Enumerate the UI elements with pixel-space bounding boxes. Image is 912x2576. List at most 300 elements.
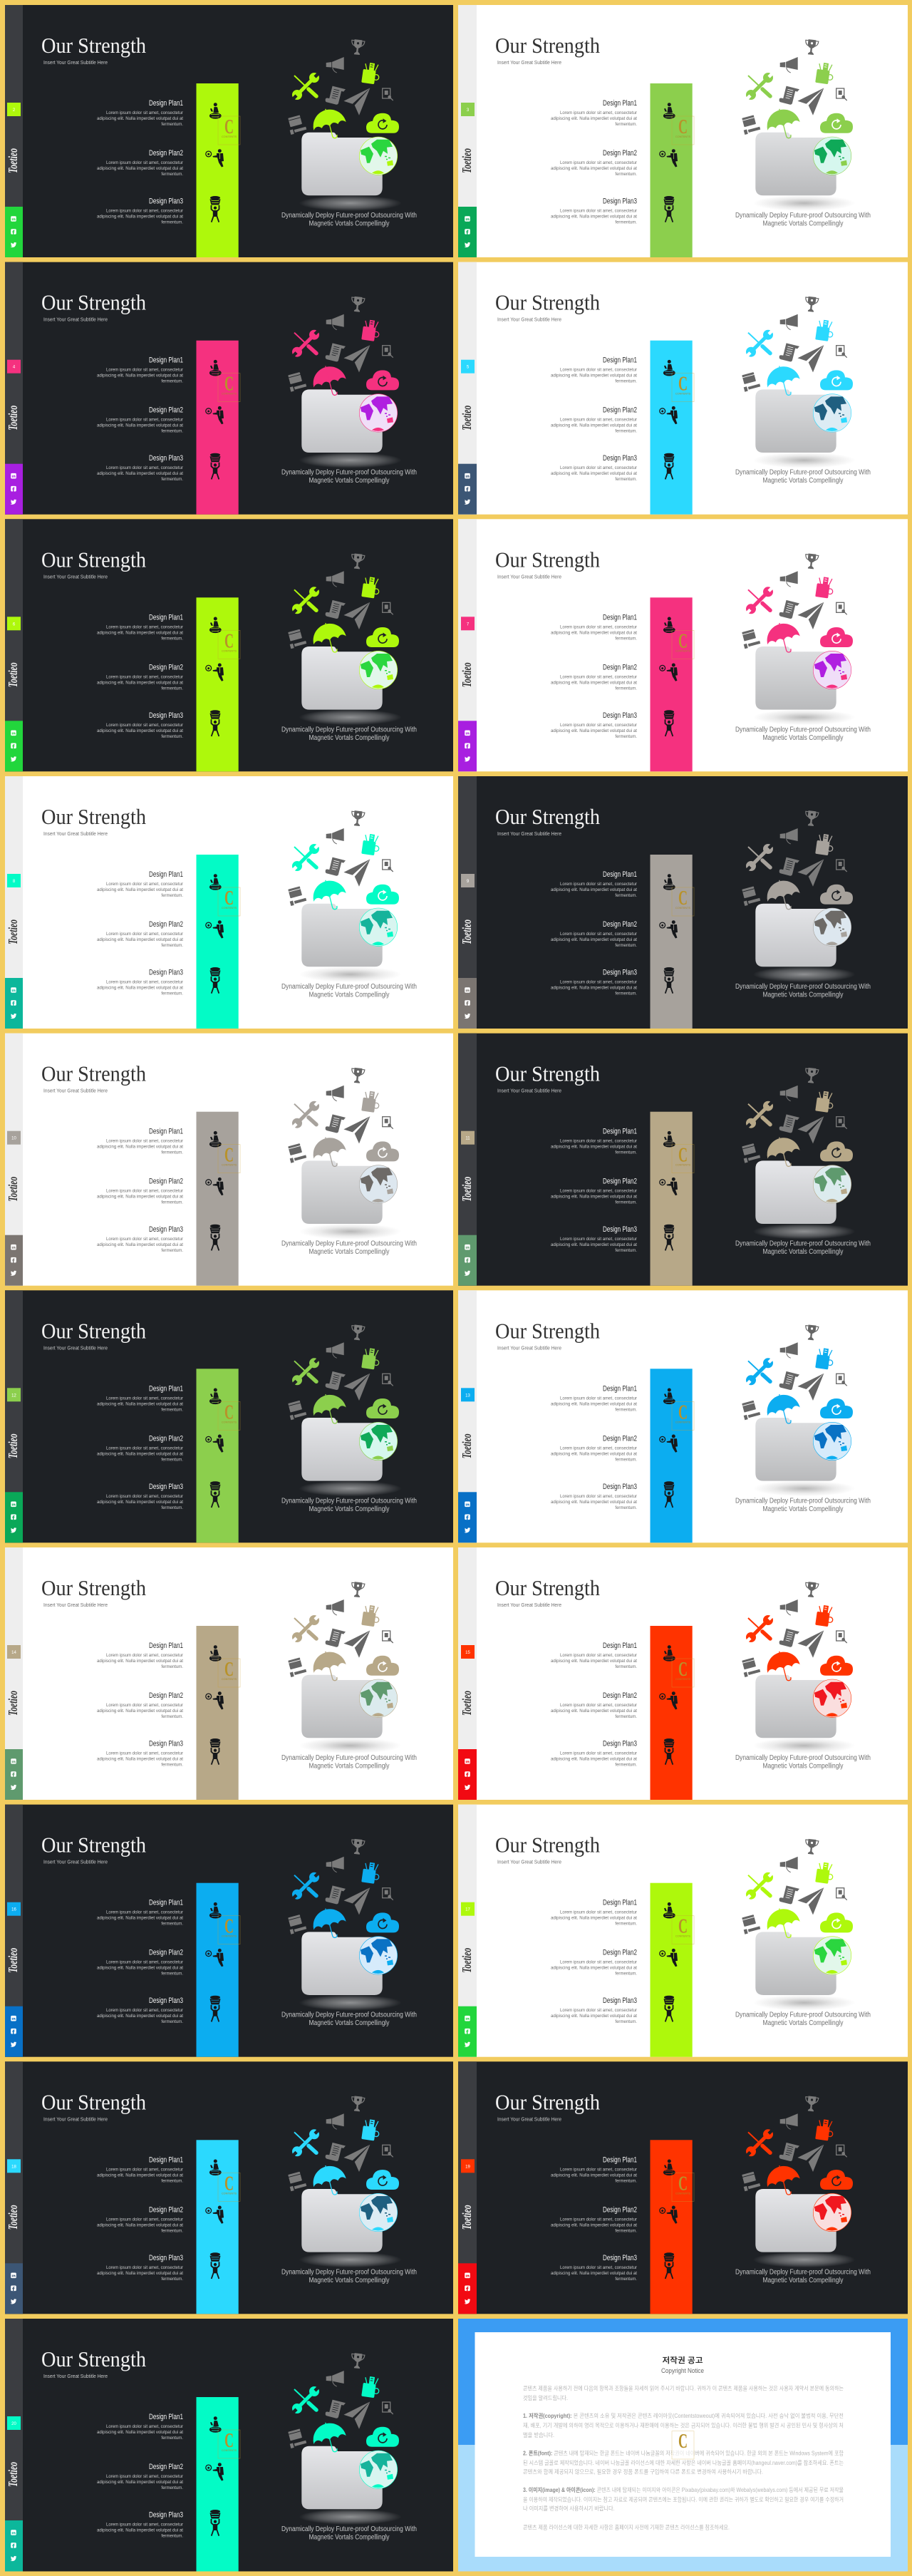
text block: Design Plan3	[97, 1483, 184, 1510]
text block: Design Plan2: adipiscing elit. Nulla imperdiet volutpat dui at	[551, 423, 637, 428]
watermark	[672, 1916, 694, 1944]
watermark: C	[224, 630, 234, 652]
icon: paper plane	[343, 345, 370, 372]
text block: Design Plan1	[97, 1642, 184, 1669]
text block: Design Plan2: Design Plan2	[149, 406, 183, 415]
icon: man with magnifier	[206, 1949, 224, 1967]
text block: Design Plan3: Lorem ipsum dolor sit amet, consectetur	[560, 1494, 638, 1499]
slide number	[7, 1645, 21, 1659]
icon: scroll	[779, 856, 799, 877]
icon: paper plane	[343, 1116, 370, 1143]
icon: trophy	[804, 1324, 819, 1341]
title: Our Strength	[41, 1833, 146, 1858]
text block: Design Plan1: Design Plan1	[149, 99, 183, 108]
text block: Design Plan3	[551, 1997, 638, 2024]
social block	[5, 721, 23, 771]
folder card	[301, 2446, 383, 2509]
text block: Design Plan1: adipiscing elit. Nulla imperdiet volutpat dui at	[551, 1916, 637, 1921]
text block: Design Plan2	[551, 1691, 638, 1719]
panel: slide 13 light blue	[458, 1290, 908, 1542]
text block: Design Plan1: Design Plan1	[603, 870, 637, 879]
text block: Design Plan3: fermentum.	[615, 2277, 637, 2282]
icon: mug of pens	[815, 1347, 834, 1370]
text block: Design Plan3: adipiscing elit. Nulla imperdiet volutpat dui at	[97, 1242, 183, 1247]
icon: tablet search	[836, 1117, 847, 1129]
icon: tools	[291, 2128, 321, 2158]
sidebar	[458, 1290, 477, 1542]
text block: Design Plan2: Design Plan2	[149, 1949, 183, 1957]
brand script: Toetieo	[460, 148, 474, 173]
slide number: 2	[13, 108, 16, 113]
text block: Design Plan1: Design Plan1	[603, 356, 637, 365]
icon: cloud refresh	[366, 370, 399, 390]
text block: Design Plan2: fermentum.	[161, 429, 183, 434]
folder shadow	[299, 967, 402, 982]
text block: Design Plan1: adipiscing elit. Nulla imperdiet volutpat dui at	[97, 887, 183, 892]
icon: man with magnifier	[206, 1691, 224, 1709]
text block: Design Plan1: adipiscing elit. Nulla imperdiet volutpat dui at	[551, 1659, 637, 1664]
watermark: C	[678, 630, 688, 652]
text block: Design Plan2: Lorem ipsum dolor sit amet, consectetur	[560, 1960, 638, 1965]
folder shadow	[753, 1480, 856, 1496]
icon: tools	[745, 329, 774, 359]
icon: cloud refresh	[820, 1656, 853, 1676]
sidebar	[458, 1547, 477, 1800]
panel: slide 15 light red	[458, 1547, 908, 1800]
text block: Design Plan3: adipiscing elit. Nulla imperdiet volutpat dui at	[97, 985, 183, 991]
caption	[735, 2268, 871, 2284]
icon: man lifting basket	[664, 1225, 674, 1250]
icon: man with magnifier	[660, 406, 678, 424]
text block: Design Plan2: adipiscing elit. Nulla imperdiet volutpat dui at	[551, 1451, 637, 1456]
slide background	[458, 2061, 908, 2314]
social block	[5, 207, 23, 257]
watermark: CONTENTS	[222, 392, 237, 396]
text block: Design Plan1: fermentum.	[615, 379, 637, 384]
icon: man with magnifier	[660, 149, 678, 167]
text block: Design Plan3	[551, 1483, 638, 1510]
text block: Design Plan2: Design Plan2	[149, 149, 183, 158]
icon: paper plane	[343, 1887, 370, 1915]
watermark	[218, 2173, 240, 2201]
caption: Magnetic Vortals Compellingly	[762, 220, 844, 228]
brand script: Toetieo	[460, 406, 474, 431]
title: Our Strength	[41, 2089, 146, 2114]
slide number: 9	[467, 880, 470, 884]
watermark	[672, 2173, 694, 2201]
social block	[458, 721, 477, 771]
caption	[281, 1497, 417, 1513]
caption: Magnetic Vortals Compellingly	[309, 1505, 390, 1513]
slide number: 15	[465, 1651, 470, 1655]
text block: Design Plan1: Design Plan1	[149, 2413, 183, 2421]
text block: Design Plan3: adipiscing elit. Nulla imperdiet volutpat dui at	[97, 1756, 183, 1762]
watermark	[218, 373, 240, 402]
blue background top	[458, 2319, 908, 2445]
icon: mug of pens	[361, 1347, 380, 1370]
text block: Design Plan3: Design Plan3	[603, 1997, 637, 2005]
icon: tools	[291, 843, 321, 872]
icon: umbrella	[763, 2161, 803, 2200]
watermark: C	[678, 116, 688, 138]
icon: tablet search	[836, 1631, 847, 1643]
slide background	[458, 1547, 908, 1800]
icon: man with magnifier	[660, 1691, 678, 1709]
slide number	[461, 1131, 475, 1145]
sidebar	[5, 1547, 23, 1800]
icon: tablet search	[383, 1631, 393, 1643]
icon: umbrella	[763, 1133, 803, 1171]
text block: Design Plan3	[551, 1739, 638, 1768]
text block: Design Plan3: adipiscing elit. Nulla imperdiet volutpat dui at	[551, 1756, 637, 1762]
text block: Design Plan3: fermentum.	[615, 2019, 637, 2024]
accent bar	[197, 1883, 239, 2057]
slide number	[7, 1388, 21, 1401]
icon: megaphone	[780, 314, 798, 330]
watermark: CONTENTS	[222, 649, 237, 652]
text block: Design Plan1: Lorem ipsum dolor sit amet, consectetur	[106, 1910, 184, 1915]
watermark: C	[678, 1916, 688, 1938]
icon: person with laptop	[209, 1389, 222, 1404]
section 1 copyright: 재, 배포, 기기 개발에 의하여 영리 목적으로 이용하거나 재판매에 이용하는 것은 금지되어 있습니다. 이러한 불법 행위 발견 시 공인된 민사 및 형사상의 처	[523, 2422, 844, 2429]
social block	[5, 2006, 23, 2057]
icon: man with magnifier	[660, 1949, 678, 1967]
slide background	[458, 1034, 908, 1286]
icon: man with magnifier	[206, 2205, 224, 2224]
icon: trophy	[351, 1324, 365, 1341]
social block	[458, 1235, 477, 1286]
text block: Design Plan3: adipiscing elit. Nulla imperdiet volutpat dui at	[551, 214, 637, 220]
text block: Design Plan1	[97, 613, 184, 641]
text block: Design Plan1: Lorem ipsum dolor sit amet, consectetur	[560, 110, 638, 115]
text block: Design Plan1	[97, 99, 184, 127]
icon: mug of pens	[815, 319, 834, 342]
icon: umbrella	[309, 2161, 349, 2200]
caption: Magnetic Vortals Compellingly	[762, 477, 844, 485]
text block: Design Plan1: Lorem ipsum dolor sit amet, consectetur	[560, 1910, 638, 1915]
icon: umbrella	[763, 1905, 803, 1942]
text block: Design Plan1: adipiscing elit. Nulla imperdiet volutpat dui at	[97, 1659, 183, 1664]
icon: megaphone	[780, 1599, 798, 1615]
icon: trophy	[351, 297, 365, 312]
icon: trophy	[351, 39, 365, 56]
text block: Design Plan3: Design Plan3	[603, 197, 637, 205]
text block: Design Plan1: adipiscing elit. Nulla imperdiet volutpat dui at	[97, 1916, 183, 1921]
text block: Design Plan2	[551, 663, 638, 691]
caption	[735, 2011, 871, 2027]
text block: Design Plan1: Lorem ipsum dolor sit amet, consectetur	[106, 368, 184, 373]
icon: man lifting basket	[209, 710, 221, 736]
accent bar	[197, 83, 239, 257]
text block: Design Plan1	[97, 1899, 184, 1927]
text block: Design Plan1	[551, 1128, 638, 1155]
caption	[735, 212, 871, 228]
text block: Design Plan3: Lorem ipsum dolor sit amet, consectetur	[560, 465, 638, 470]
icon: umbrella	[763, 876, 803, 914]
text block: Design Plan3	[97, 2510, 184, 2539]
sidebar	[5, 1290, 23, 1542]
brand script: Toetieo	[460, 919, 474, 944]
title: Our Strength	[495, 290, 600, 315]
social block	[5, 1749, 23, 1800]
text block: Design Plan2: fermentum.	[615, 1972, 637, 1977]
slide number: 17	[465, 1908, 470, 1912]
slide background	[458, 5, 908, 257]
text block: Design Plan2: Design Plan2	[149, 663, 183, 671]
text block: Design Plan2: Lorem ipsum dolor sit amet, consectetur	[106, 1960, 184, 1965]
intro text: 콘텐츠 제품을 사용하기 전에 다음의 항목과 조항들을 자세히 읽어 주시기 바랍니다. 귀하가 이 콘텐츠 제품을 사용하는 것은 사용자 계약서 본문에 동의하는	[523, 2385, 844, 2392]
watermark: C	[678, 1401, 688, 1423]
icon: cloud refresh	[366, 2427, 399, 2447]
icon: paper plane	[797, 345, 824, 372]
icon: mug of pens	[815, 2118, 834, 2141]
text block: Design Plan3: fermentum.	[615, 734, 637, 739]
text block: Design Plan3: adipiscing elit. Nulla imperdiet volutpat dui at	[551, 1242, 637, 1247]
text block: Design Plan2: Lorem ipsum dolor sit amet, consectetur	[560, 1703, 638, 1708]
text block: Design Plan2	[97, 2205, 184, 2233]
section 3 image and icon: 나 이미지를 변경하여 사용하시기 바랍니다.	[523, 2505, 615, 2512]
text block: Design Plan2: Design Plan2	[603, 1691, 637, 1700]
slide number: 18	[11, 2165, 16, 2169]
panel: slide 3 light green	[458, 5, 908, 257]
sidebar	[5, 2061, 23, 2314]
watermark: C	[224, 887, 234, 910]
icon: trophy	[804, 553, 819, 570]
icon: scroll	[325, 1627, 346, 1649]
slide number: 20	[11, 2422, 16, 2426]
accent bar	[197, 597, 239, 771]
panel: slide 4 dark pink	[5, 262, 453, 515]
text block: Design Plan1	[551, 613, 638, 641]
icon: man with magnifier	[206, 663, 224, 681]
social block	[458, 1749, 477, 1800]
caption	[735, 469, 871, 485]
text block: Design Plan1: Lorem ipsum dolor sit amet, consectetur	[560, 1139, 638, 1144]
slide number	[7, 103, 21, 116]
accent bar	[650, 855, 693, 1029]
icon: cloud refresh	[820, 113, 853, 133]
caption: Magnetic Vortals Compellingly	[309, 220, 390, 228]
icon: scroll	[325, 1113, 346, 1134]
icon: globe	[359, 651, 398, 689]
icon: laptops	[286, 114, 307, 135]
brand script: Toetieo	[460, 2205, 474, 2230]
notice heading: 저작권 공고	[663, 2355, 703, 2365]
text block: Design Plan2: fermentum.	[161, 1200, 183, 1205]
slide number: 3	[467, 108, 470, 113]
text block: Design Plan2: Design Plan2	[603, 663, 637, 671]
sidebar	[458, 1805, 477, 2057]
icon: man with magnifier	[206, 149, 224, 167]
subtitle: Insert Your Great Subtitle Here	[497, 318, 561, 323]
caption	[281, 2525, 417, 2542]
icon: trophy	[804, 1839, 819, 1855]
text block: Design Plan2: Lorem ipsum dolor sit amet, consectetur	[560, 418, 638, 423]
icon: tools	[291, 1871, 321, 1901]
caption: Dynamically Deploy Future-proof Outsourcing With	[735, 2011, 871, 2019]
text block: Design Plan2: adipiscing elit. Nulla imperdiet volutpat dui at	[551, 2222, 637, 2227]
icon: paper plane	[797, 2145, 824, 2172]
text block: Design Plan2: Design Plan2	[603, 920, 637, 929]
text block: Design Plan3: Lorem ipsum dolor sit amet, consectetur	[106, 208, 184, 214]
icon: man with magnifier	[660, 1434, 678, 1453]
caption	[281, 469, 417, 485]
text block: Design Plan3	[551, 968, 638, 996]
panel: slide 9 dark gray	[458, 776, 908, 1029]
icon: trophy	[351, 1839, 365, 1855]
icon: cloud refresh	[820, 1141, 853, 1161]
text block: Design Plan2: adipiscing elit. Nulla imperdiet volutpat dui at	[97, 423, 183, 428]
icon: man lifting basket	[209, 967, 221, 994]
caption	[735, 1240, 871, 1256]
text block: Design Plan3: Lorem ipsum dolor sit amet, consectetur	[560, 1237, 638, 1242]
icon: man lifting basket	[664, 710, 674, 736]
text block: Design Plan2	[97, 1691, 184, 1719]
text block: Design Plan2: adipiscing elit. Nulla imperdiet volutpat dui at	[97, 2222, 183, 2227]
text block: Design Plan2: Lorem ipsum dolor sit amet, consectetur	[560, 160, 638, 165]
icon: person with laptop	[209, 360, 222, 376]
icon: trophy	[804, 297, 819, 312]
icon: umbrella	[309, 105, 349, 143]
icon: cloud refresh	[820, 885, 853, 905]
watermark	[218, 2430, 240, 2458]
slide background	[458, 1805, 908, 2057]
folder shadow	[299, 1480, 402, 1496]
icon: laptops	[286, 2428, 307, 2448]
icon: mug of pens	[361, 1862, 380, 1885]
title: Our Strength	[41, 1318, 146, 1343]
text block: Design Plan1: adipiscing elit. Nulla imperdiet volutpat dui at	[97, 373, 183, 378]
text block: Design Plan3: Design Plan3	[603, 711, 637, 720]
subtitle: Insert Your Great Subtitle Here	[43, 61, 108, 66]
text block: Design Plan1: Design Plan1	[603, 1899, 637, 1907]
text block: Design Plan1: Lorem ipsum dolor sit amet, consectetur	[106, 624, 184, 629]
watermark	[672, 2431, 694, 2459]
slide number	[461, 2159, 475, 2173]
icon: laptops	[286, 1914, 307, 1934]
text block: Design Plan2: Design Plan2	[603, 1178, 637, 1186]
title: Our Strength	[41, 2346, 146, 2371]
text block: Design Plan2: fermentum.	[161, 686, 183, 691]
icon: trophy	[351, 1582, 365, 1598]
icon: tablet search	[383, 2402, 393, 2414]
icon: laptops	[286, 1657, 307, 1677]
subtitle: Insert Your Great Subtitle Here	[497, 832, 561, 837]
icon: umbrella	[763, 1390, 803, 1428]
icon: megaphone	[326, 1342, 344, 1358]
icon: globe	[359, 1165, 398, 1203]
sidebar	[5, 5, 23, 257]
caption	[281, 1754, 417, 1771]
text block: Design Plan1: Design Plan1	[603, 99, 637, 108]
icon: scroll	[779, 1113, 799, 1134]
section 2 font	[523, 2449, 844, 2475]
slide background	[5, 1805, 453, 2057]
icon: megaphone	[326, 2371, 344, 2386]
icon: umbrella	[309, 1390, 349, 1428]
caption: Magnetic Vortals Compellingly	[309, 1248, 390, 1256]
icon: man lifting basket	[209, 1738, 221, 1765]
slide number	[7, 2416, 21, 2430]
icon: laptops	[740, 1914, 761, 1934]
sidebar	[458, 776, 477, 1029]
text block: Design Plan2: adipiscing elit. Nulla imperdiet volutpat dui at	[97, 1195, 183, 1200]
icon: man lifting basket	[664, 453, 674, 479]
caption: Dynamically Deploy Future-proof Outsourcing With	[281, 2525, 417, 2533]
icon: man with magnifier	[660, 663, 678, 681]
icon: umbrella	[309, 1647, 349, 1685]
icon: paper plane	[343, 2145, 370, 2172]
caption: Dynamically Deploy Future-proof Outsourcing With	[735, 726, 871, 733]
text block: Design Plan3: fermentum.	[615, 1248, 637, 1253]
caption	[735, 726, 871, 742]
watermark: CONTENTS	[675, 135, 690, 138]
slide number	[461, 617, 475, 630]
watermark: CONTENTS	[675, 392, 690, 396]
accent bar	[650, 341, 693, 515]
icon: mug of pens	[361, 319, 380, 342]
slide number: 13	[465, 1393, 470, 1398]
title: Our Strength	[495, 1061, 600, 1086]
accent bar	[197, 2140, 239, 2314]
text block: Design Plan2	[97, 1949, 184, 1977]
text block: Design Plan2: Design Plan2	[603, 1949, 637, 1957]
icon: mug of pens	[815, 833, 834, 856]
text block: Design Plan3	[97, 1997, 184, 2024]
icon: tablet search	[836, 1374, 847, 1386]
watermark	[218, 1916, 240, 1944]
icon: paper plane	[797, 88, 824, 115]
caption: Dynamically Deploy Future-proof Outsourcing With	[735, 1240, 871, 1248]
text block: Design Plan3: Design Plan3	[603, 454, 637, 463]
slide number: 10	[11, 1137, 16, 1141]
section 1 copyright	[523, 2412, 844, 2438]
section 2 font: 2. 폰트(font): 콘텐츠 내에 탑재되는 한글 폰트는 네이버 나눔글꼴의 저작권이 네이버에 귀속되어 있습니다. 한글 외의 본 폰트는 Windows System에 포함	[523, 2449, 844, 2456]
caption: Dynamically Deploy Future-proof Outsourcing With	[735, 469, 871, 477]
icon: tools	[291, 71, 321, 101]
caption	[735, 1754, 871, 1771]
accent bar	[197, 1369, 239, 1542]
text block: Design Plan3	[551, 711, 638, 739]
slide number: 8	[13, 880, 16, 884]
icon: umbrella	[763, 362, 803, 400]
icon: person with laptop	[663, 1131, 675, 1148]
text block: Design Plan3: fermentum.	[615, 220, 637, 225]
text block: Design Plan2: adipiscing elit. Nulla imperdiet volutpat dui at	[551, 1966, 637, 1971]
icon: man with magnifier	[660, 2205, 678, 2224]
folder shadow	[299, 453, 402, 468]
text block: Design Plan2: fermentum.	[161, 2228, 183, 2233]
brand script: Toetieo	[460, 1177, 474, 1202]
text block: Design Plan3	[97, 1739, 184, 1768]
text block: Design Plan2	[97, 2463, 184, 2490]
text block: Design Plan3: adipiscing elit. Nulla imperdiet volutpat dui at	[551, 2271, 637, 2276]
watermark	[218, 1145, 240, 1173]
icon: laptops	[286, 1400, 307, 1420]
section 3 image and icon: 3. 이미지(image) & 아이콘(icon): 콘텐츠 내에 탑재되는 이미지와 아이콘은 Pixabay(pixabay.com)와 Webalys(webalys.com) 등에서 제공된 무료 저작물	[523, 2486, 844, 2493]
icon: tools	[291, 1614, 321, 1644]
text block: Design Plan1: Design Plan1	[603, 613, 637, 622]
icon: paper plane	[343, 88, 370, 115]
icon: person with laptop	[663, 1645, 675, 1661]
panel: slide 2 dark lime	[5, 5, 453, 257]
text block: Design Plan3: fermentum.	[615, 477, 637, 482]
text block: Design Plan1: Design Plan1	[149, 870, 183, 879]
accent bar	[650, 597, 693, 771]
text block: Design Plan2: adipiscing elit. Nulla imperdiet volutpat dui at	[551, 1709, 637, 1714]
text block: Design Plan2: Lorem ipsum dolor sit amet, consectetur	[106, 2474, 184, 2479]
caption: Magnetic Vortals Compellingly	[762, 1248, 844, 1256]
